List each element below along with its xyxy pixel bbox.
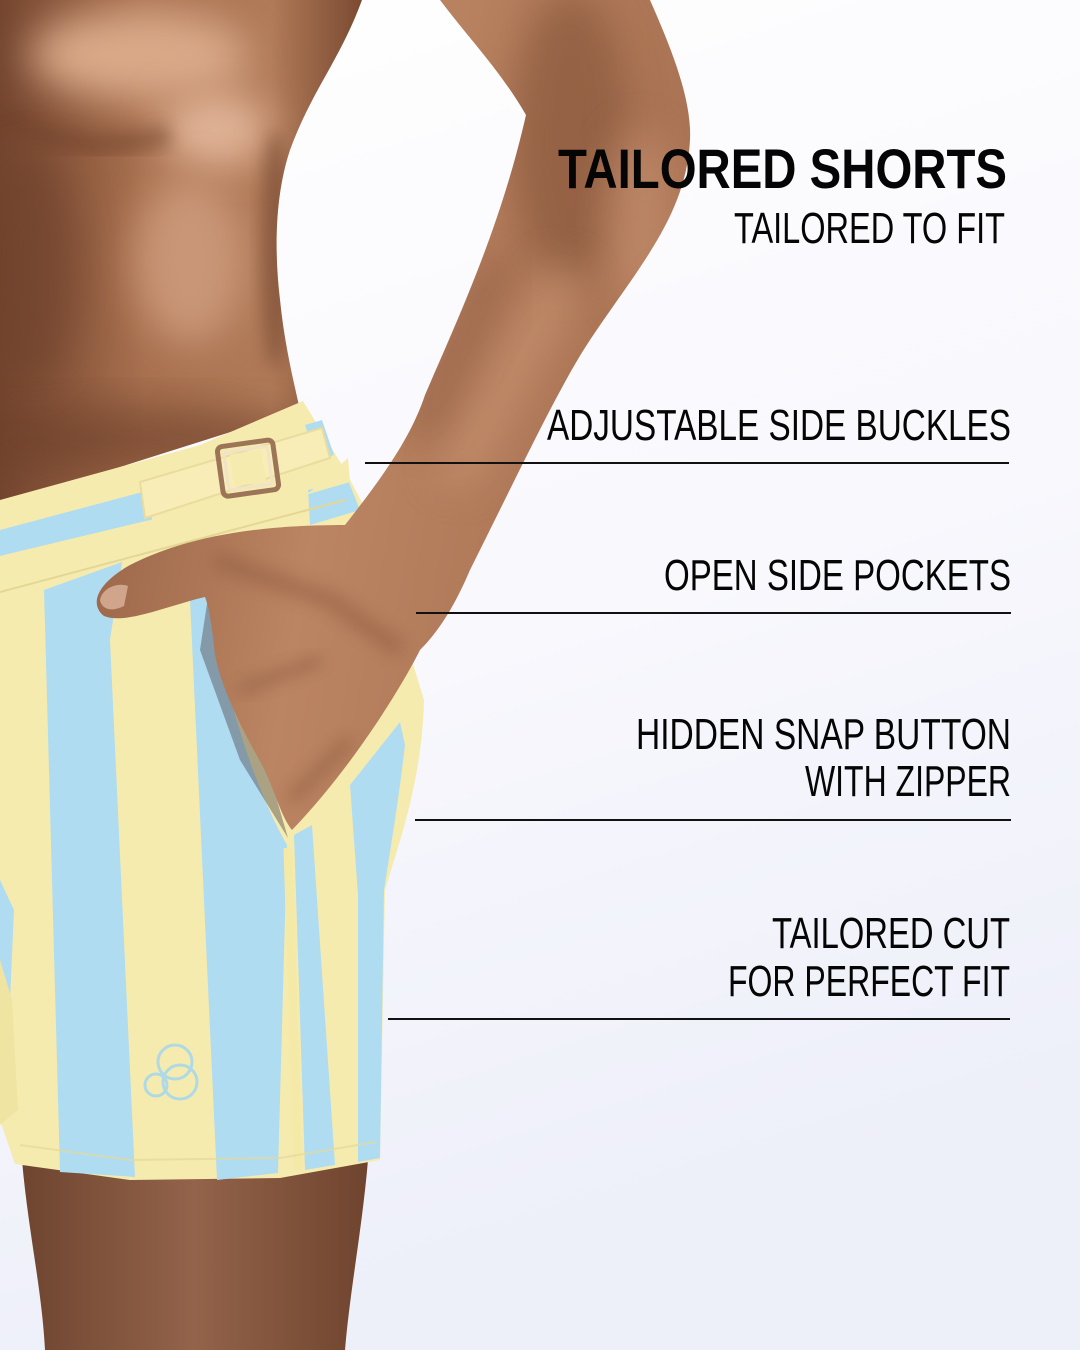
- shorts stripes: [0, 420, 405, 1180]
- arm and hand: [80, 0, 700, 850]
- feature: hidden snap button with zipper: [415, 710, 1011, 821]
- shorts base: [0, 401, 424, 1180]
- buckle: [217, 439, 279, 497]
- waistband: [0, 458, 350, 592]
- waistband seam: [0, 500, 345, 592]
- model photo illustration: [0, 0, 700, 1350]
- hem stitching: [20, 1142, 376, 1160]
- thigh: [22, 1160, 368, 1350]
- pocket opening shadow: [200, 597, 288, 838]
- logo: [145, 1045, 197, 1099]
- belt tab: [140, 428, 330, 518]
- title: TAILORED SHORTS: [558, 137, 1007, 200]
- finger shading: [215, 560, 400, 650]
- torso: [0, 0, 362, 505]
- chest and abdomen shading: [0, 10, 310, 475]
- thumbnail: [100, 585, 128, 609]
- elbow and forearm shading: [510, 0, 630, 290]
- back leg sliver: [0, 960, 18, 1125]
- feature: tailored cut for perfect fit: [388, 909, 1010, 1020]
- side seam: [288, 848, 298, 1170]
